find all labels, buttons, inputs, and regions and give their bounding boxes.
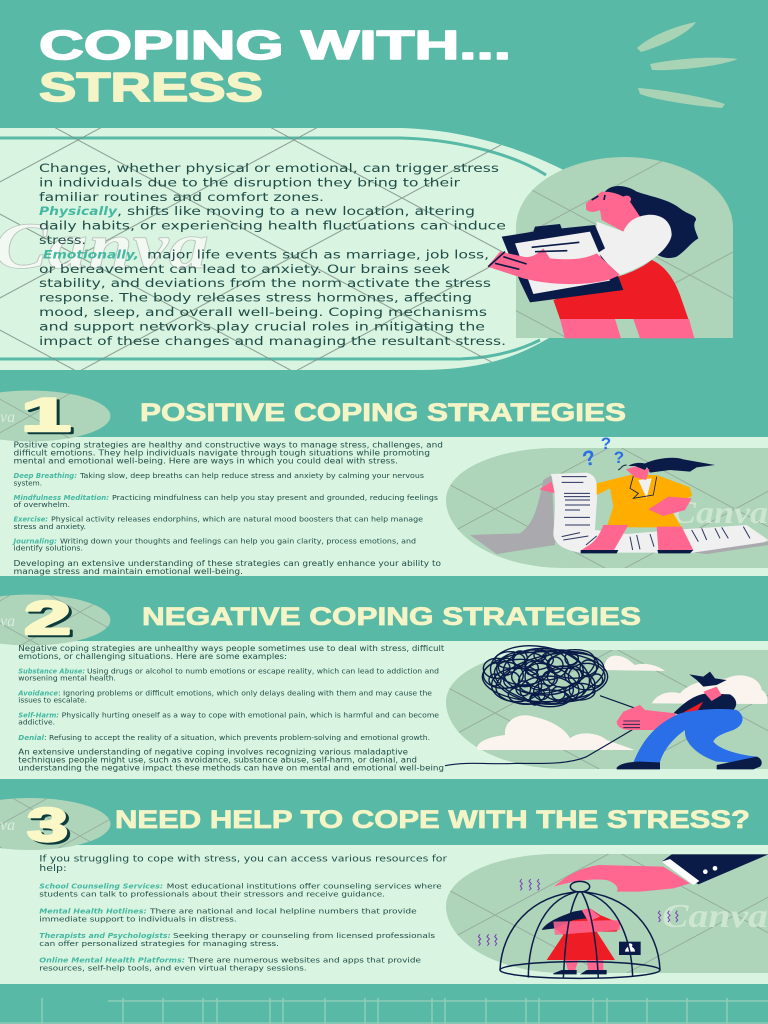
intro text: response. The body releases stress hormones, affecting xyxy=(39,291,472,305)
body text: techniques people might use, such as avoidance, substance abuse, self-harm, or denial, and xyxy=(18,756,417,765)
body text: Seeking therapy or counseling from licensed professionals xyxy=(173,931,435,940)
illustration: woman with long list xyxy=(446,434,768,568)
body text: Negative coping strategies are unhealthy ways people sometimes use to deal with stress, difficult xyxy=(18,644,444,653)
body text: Using drugs or alcohol to numb emotions or escape reality, which can lead to addiction and xyxy=(87,667,439,675)
section 2: negative coping strategies xyxy=(0,591,768,779)
icon: question marks: ? xyxy=(601,434,611,453)
panel background xyxy=(0,641,768,779)
illustration: man untangling a knot xyxy=(445,638,768,769)
number badge 1: 1 xyxy=(24,390,74,443)
body text: Substance Abuse: xyxy=(18,667,85,675)
body text: Mental Health Hotlines: xyxy=(39,906,147,915)
footer decoration xyxy=(0,998,768,1024)
intro text: mood, sleep, and overall well-being. Coping mechanisms xyxy=(39,305,487,319)
number badge 2: va xyxy=(0,613,15,630)
body text: identify solutions. xyxy=(14,545,83,553)
title xyxy=(39,22,511,110)
intro text: Changes, whether physical or emotional, can trigger stress xyxy=(39,161,499,175)
body text xyxy=(17,644,444,773)
intro text: familiar routines and comfort zones. xyxy=(39,190,324,204)
icon: squiggle marks xyxy=(478,879,678,946)
body text: Avoidance xyxy=(17,690,58,698)
title: STRESS xyxy=(39,64,263,110)
body text: mental and emotional well-being. Here are ways in which you could deal with stress. xyxy=(14,457,398,466)
body text: Writing down your thoughts and feelings can help you gain clarity, process emotions, and xyxy=(60,537,416,545)
body text: students can talk to professionals about their stressors and receive guidance. xyxy=(39,890,385,899)
body text: help: xyxy=(39,864,67,874)
icon: question marks: ? xyxy=(614,448,624,467)
section 3: need help to cope xyxy=(0,798,768,984)
body text: Deep Breathing: xyxy=(14,472,77,480)
illustration: woman with long list: Canva xyxy=(672,494,768,530)
section 1: positive coping strategies xyxy=(0,388,768,576)
body text: Physical activity releases endorphins, which are natural mood boosters that can help manage xyxy=(51,516,423,524)
icon: question marks: ? xyxy=(580,446,598,471)
body text: If you struggling to cope with stress, you can access various resources for xyxy=(39,854,447,864)
illustration: caged woman and reaching hand: Canva xyxy=(662,898,768,935)
body text: Most educational institutions offer counseling services where xyxy=(167,882,442,891)
intro text: in individuals due to the disruption they bring to their xyxy=(39,175,460,189)
icon: birdcage xyxy=(500,881,660,978)
intro text: , shifts like moving to a new location, altering xyxy=(117,204,475,218)
body text: Taking slow, deep breaths can help reduce stress and anxiety by calming your nervous xyxy=(79,472,425,480)
body text: can offer personalized strategies for managing stress. xyxy=(39,939,279,948)
intro text: impact of these changes and managing the resultant stress. xyxy=(39,334,506,348)
body text: There are national and local helpline numbers that provide xyxy=(149,906,417,915)
intro text: Emotionally, xyxy=(43,247,139,261)
number badge 1 xyxy=(0,388,110,443)
body text: difficult emotions. They help individuals navigate through tough situations while promoting xyxy=(14,449,430,458)
body text: Developing an extensive understanding of these strategies can greatly enhance your ability to xyxy=(14,559,441,568)
number badge 3: va xyxy=(0,817,15,834)
number badge 3: 3 xyxy=(30,800,71,853)
body text: resources, self-help tools, and even virtual therapy sessions. xyxy=(39,963,307,972)
panel background xyxy=(0,437,768,576)
body text: addictive. xyxy=(18,719,55,727)
body text: of overwhelm. xyxy=(14,501,70,509)
body text: stress and anxiety. xyxy=(14,523,86,531)
number badge 2 xyxy=(0,591,110,646)
body text: : Refusing to accept the reality of a situation, which prevents problem-solving and emotional growth. xyxy=(44,734,430,742)
body text: Self-Harm: xyxy=(18,712,59,720)
body text: immediate support to individuals in distress. xyxy=(39,914,237,923)
number badge 3 xyxy=(0,798,110,853)
body text: Physically hurting oneself as a way to cope with emotional pain, which is harmful and can become xyxy=(62,712,439,720)
body text: : Ignoring problems or difficult emotions, which only delays dealing with them and may cause the xyxy=(58,690,432,698)
body text: School Counseling Services: xyxy=(39,882,163,891)
body text: Mindfulness Meditation: xyxy=(14,494,109,502)
body text: Practicing mindfulness can help you stay present and grounded, reducing feelings xyxy=(112,494,439,502)
panel background xyxy=(0,845,768,984)
body text: understanding the negative impact these methods can have on mental and emotional well-being xyxy=(18,764,444,773)
title: COPING WITH... xyxy=(39,22,511,68)
number badge 2: 2 xyxy=(24,591,71,644)
icon: question marks xyxy=(580,434,624,471)
number badge 3: 3 xyxy=(27,798,68,851)
intro text: daily habits, or experiencing health fluctuations can induce xyxy=(39,219,506,233)
intro text: major life events such as marriage, job loss, xyxy=(147,247,489,261)
body text: manage stress and maintain emotional well-being. xyxy=(14,567,243,576)
body text: An extensive understanding of negative coping involves recognizing various maladaptive xyxy=(18,748,408,757)
body text: Exercise: xyxy=(14,516,48,524)
intro text: or bereavement can lead to anxiety. Our brains seek xyxy=(39,262,451,276)
body text: emotions, or challenging situations. Here are some examples: xyxy=(18,652,287,661)
number badge 2: 2 xyxy=(27,593,74,646)
number badge 1: va xyxy=(0,409,15,426)
body text xyxy=(11,440,443,576)
heading: POSITIVE COPING STRATEGIES xyxy=(140,399,626,427)
body text xyxy=(39,854,447,972)
illustration: caged woman and reaching hand xyxy=(446,854,768,978)
intro text: Physically xyxy=(39,204,118,218)
body text: Therapists and Psychologists: xyxy=(39,931,171,940)
body text: system. xyxy=(14,479,42,487)
body text: Positive coping strategies are healthy and constructive ways to manage stress, challenges, and xyxy=(14,440,443,450)
panel: introduction xyxy=(0,128,600,370)
body text: issues to escalate. xyxy=(18,697,87,705)
intro text: stress. xyxy=(39,233,86,247)
body text: Online Mental Health Platforms: xyxy=(39,955,185,964)
icon: tangled scribble xyxy=(482,638,609,713)
body text: Journaling: xyxy=(11,537,57,545)
heading: NEED HELP TO COPE WITH THE STRESS? xyxy=(115,806,750,834)
body text: Denial xyxy=(18,734,45,742)
intro text: stability, and deviations from the norm activate the stress xyxy=(39,276,491,290)
icon: decorative brush strokes xyxy=(637,22,738,108)
body text: worsening mental health. xyxy=(18,674,116,682)
illustration: woman with clipboard in arch xyxy=(487,157,733,338)
heading: NEGATIVE COPING STRATEGIES xyxy=(142,603,641,631)
body text: There are numerous websites and apps that provide xyxy=(187,955,422,964)
intro text xyxy=(39,161,506,348)
number badge 1: 1 xyxy=(21,388,71,441)
intro text: and support networks play crucial roles in mitigating the xyxy=(39,319,485,333)
